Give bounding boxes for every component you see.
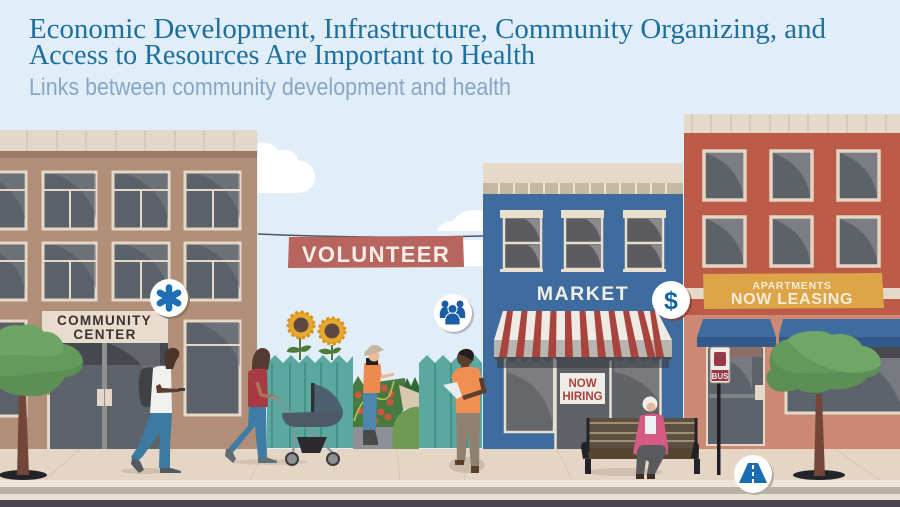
storefront [505,357,554,432]
tree right [766,331,881,480]
title: Economic Development, Infrastructure, Community Organizing, and [29,14,826,45]
tree left [0,325,83,480]
title [29,14,826,71]
icon: people [434,294,474,334]
garden [353,376,419,449]
apartment window right [786,347,900,413]
awnings [697,319,900,347]
banner: now leasing: NOW LEASING [731,291,853,308]
fence [267,355,482,448]
icon: dollar [652,281,692,321]
clouds [258,142,483,266]
stroller [270,383,343,465]
man with backpack [121,348,185,474]
sidewalk and street [0,449,900,507]
sign: now hiring: HIRING [562,391,603,403]
building: market [483,163,683,449]
icon: road [734,455,774,495]
banner: now leasing: APARTMENTS [752,280,832,292]
icon: asterisk [150,279,190,319]
subtitle: Links between community development and health [29,74,511,101]
building: apartments [684,114,900,449]
title: Access to Resources Are Important to Health [29,40,535,71]
woman with stroller [225,348,308,465]
windows [0,172,240,416]
awning [494,311,672,368]
sign: community center: CENTER [73,327,137,342]
market windows [504,217,663,269]
sign: community center [42,311,168,343]
banner: now leasing [703,273,884,309]
building: community center [0,130,257,449]
sign: community center: COMMUNITY [57,313,152,328]
sign: now hiring [560,373,605,404]
icon: dollar: $ [664,287,678,315]
gardener [354,345,394,445]
sunflowers [288,312,345,360]
banner: volunteer [258,234,483,268]
bench [581,418,700,476]
sign: now hiring: NOW [568,378,597,390]
door [50,343,168,449]
bus stop sign: BUS [712,372,729,381]
apartment door [707,347,764,445]
man with clipboard [443,349,485,473]
seated woman [633,396,668,479]
banner: volunteer: VOLUNTEER [302,242,450,267]
market sign: MARKET [537,283,629,305]
apartment windows [704,151,879,266]
bus stop sign [710,347,730,475]
